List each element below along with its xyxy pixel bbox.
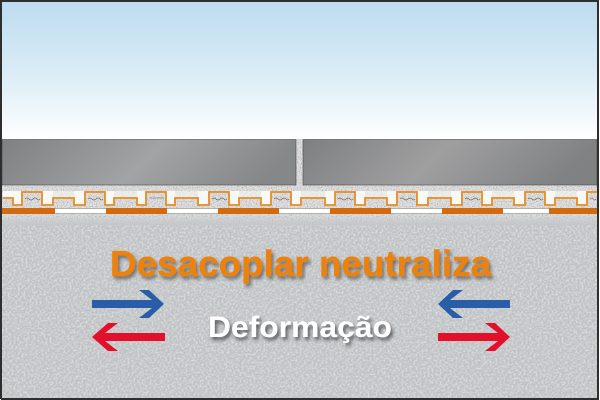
label: Deformação: Deformação: [208, 311, 392, 344]
pale band above the lower plateaus: [53, 191, 577, 198]
arrow: red right, right side: [438, 323, 510, 351]
decoupling membrane: [3, 191, 597, 205]
heading: Desacoplar neutraliza: Desacoplar neutraliza: [110, 243, 492, 284]
panel: thin-set mortar layer: [1, 185, 598, 225]
white channels of membrane: [3, 191, 587, 205]
arrow: blue right, left side: [92, 290, 164, 318]
panel: right tile: [303, 140, 597, 185]
panel: sky background: [1, 1, 598, 139]
orange membrane profile: [3, 192, 597, 205]
panel: grout joint: [296, 139, 303, 185]
panel: left tile: [2, 140, 296, 185]
fleece waves under membrane: [25, 198, 596, 200]
arrow: blue left, right side: [438, 290, 510, 318]
arrow: red left, left side: [92, 323, 165, 351]
panel: lower mortar substrate: [1, 214, 598, 398]
strip of orange and white bars: [2, 208, 597, 214]
